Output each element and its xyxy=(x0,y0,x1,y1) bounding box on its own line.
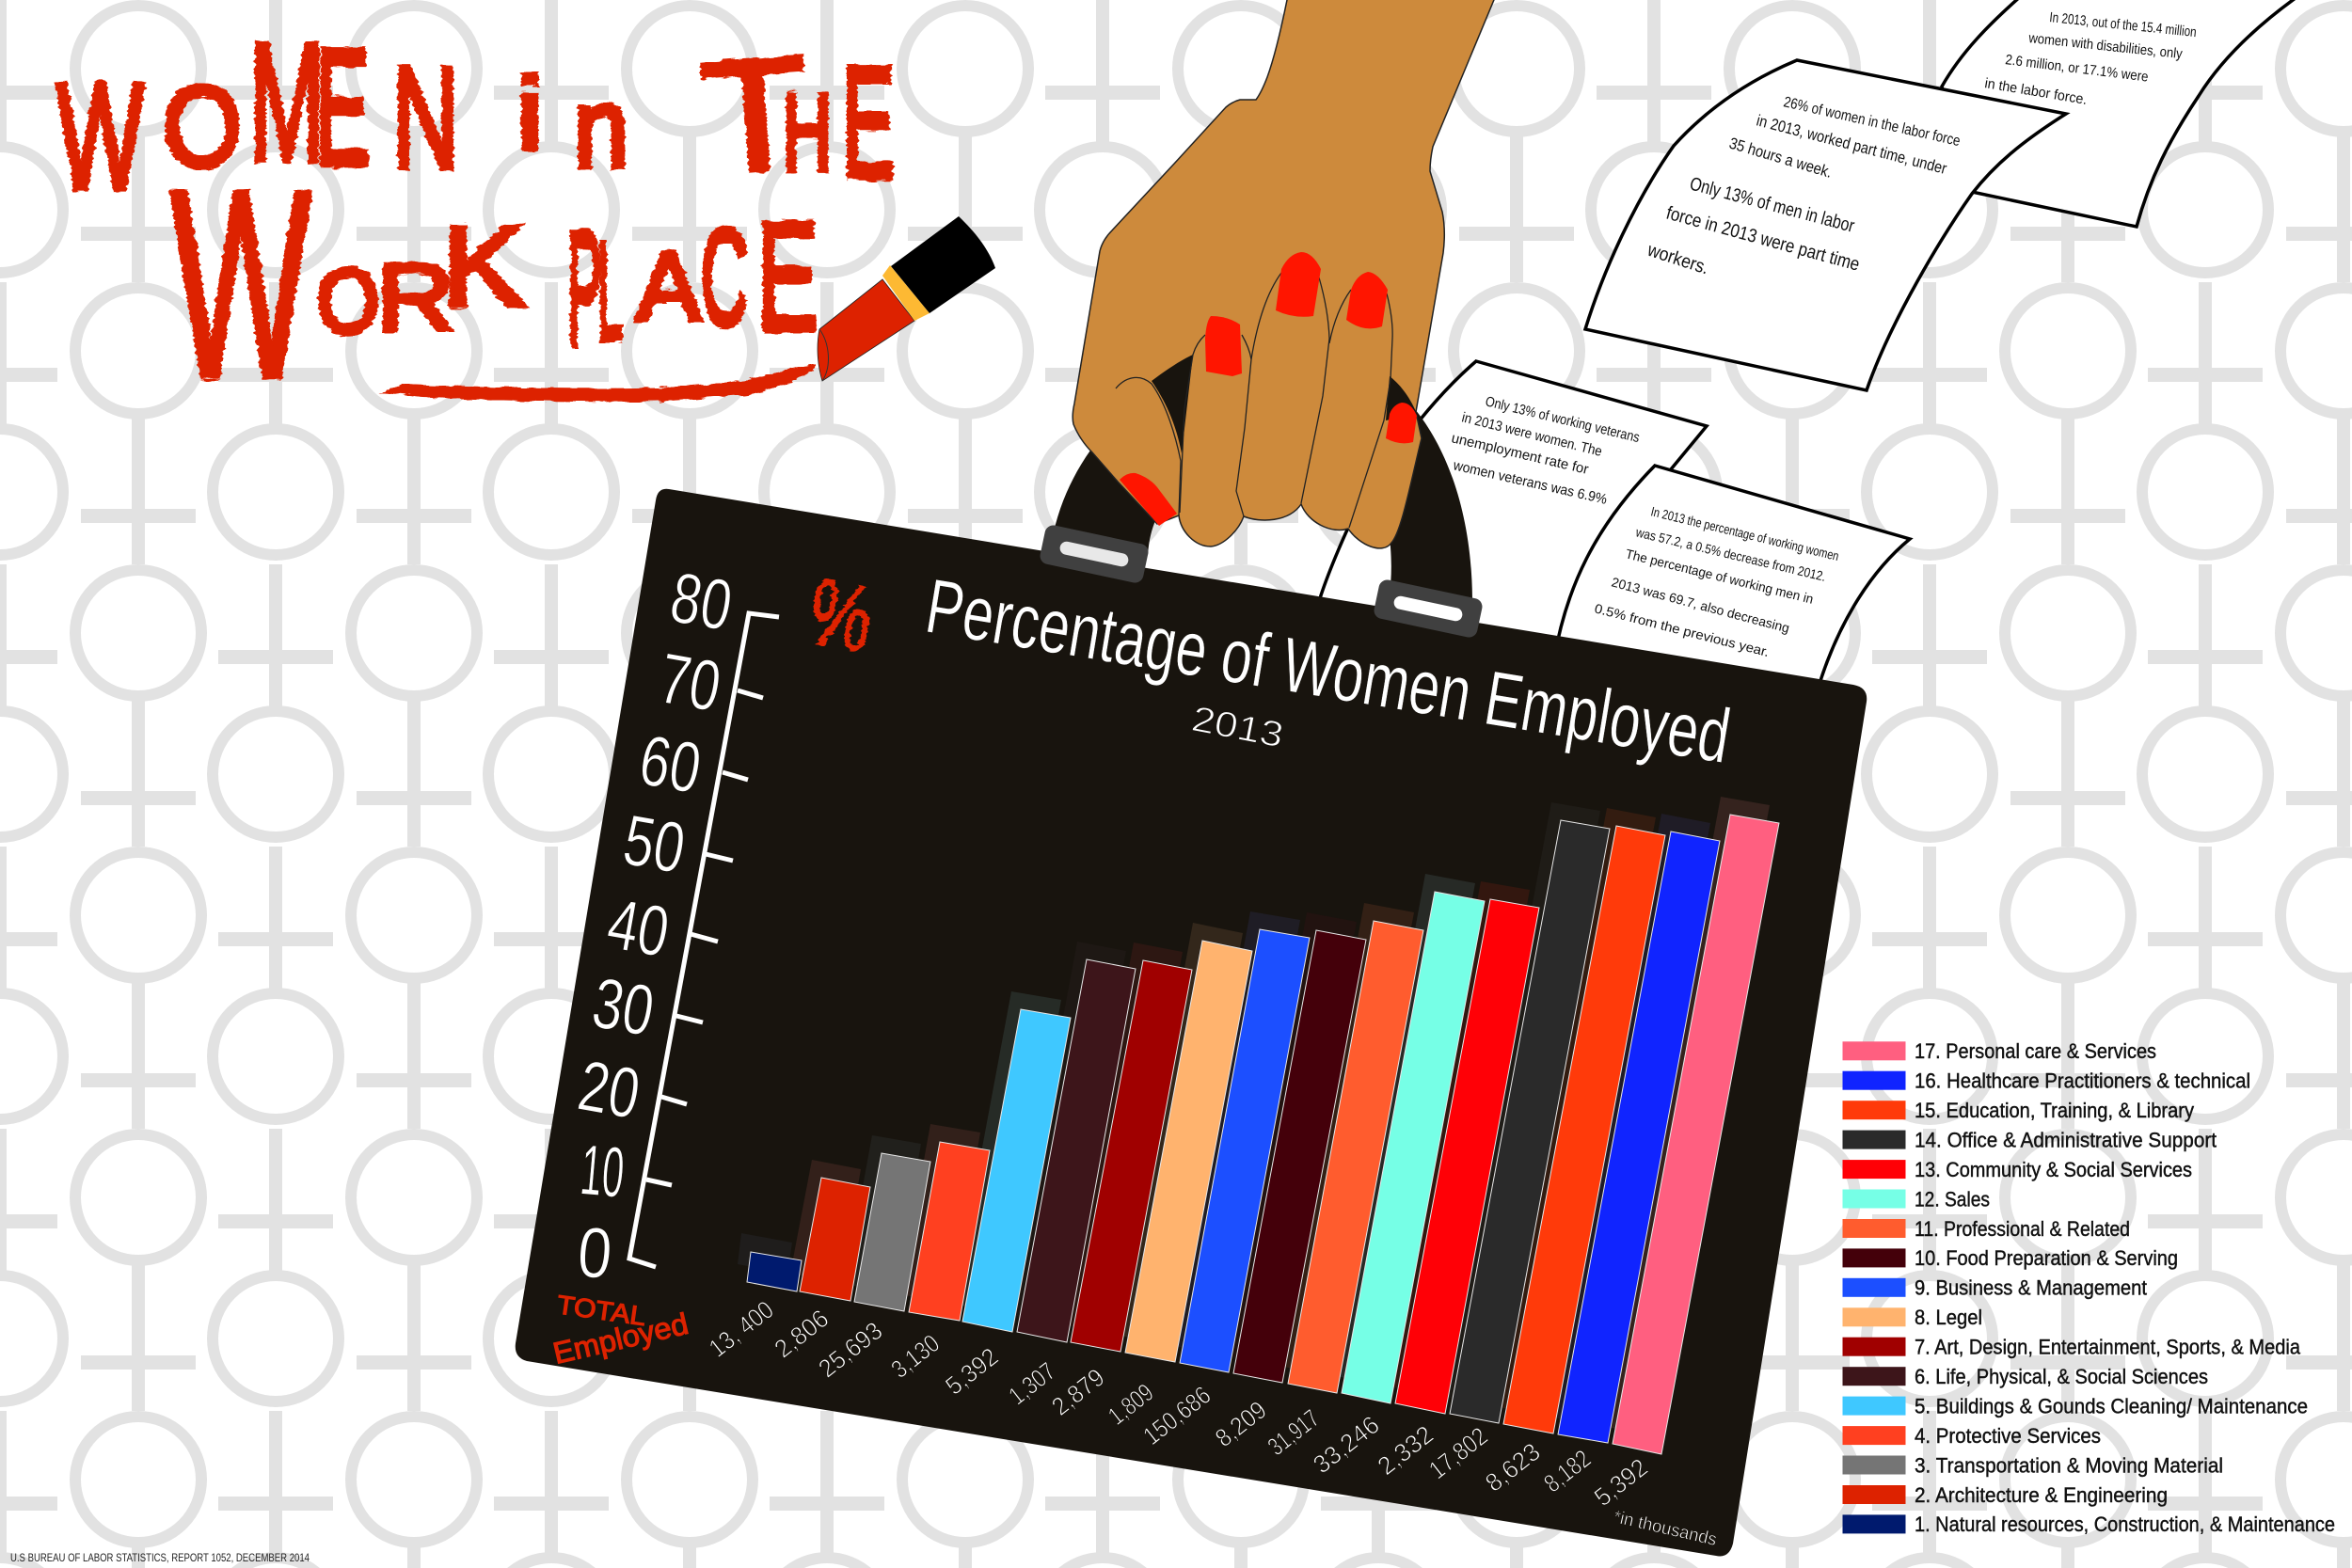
paper: disabilities: In 2013, out of the 15.4 million xyxy=(2049,9,2198,40)
paper: part time work: 26% of women in the labor force xyxy=(1782,94,1962,150)
title: Women in the Workplace: P xyxy=(567,198,602,381)
footnote: in thousands: *in thousands xyxy=(1612,1507,1719,1550)
lipstick underline stroke xyxy=(380,364,816,402)
bar chart xyxy=(738,797,1779,1454)
y axis labels: 70 xyxy=(654,638,726,727)
total employed values: 150,686 xyxy=(1137,1381,1216,1450)
title: Women in the Workplace: K xyxy=(442,202,525,330)
legend xyxy=(1842,1039,2335,1536)
legend: 15. Education, Training, & Library xyxy=(1915,1099,2194,1122)
title: Women in the Workplace: O xyxy=(163,63,242,190)
total employed values: 2,332 xyxy=(1373,1420,1438,1481)
total employed values: 17,802 xyxy=(1423,1422,1493,1484)
paper: part time work: workers. xyxy=(1645,240,1711,278)
title: Women in the Workplace: W xyxy=(56,54,144,221)
paper: working women percentage: 0.5% from the previous year. xyxy=(1593,600,1771,659)
legend: 13. Community & Social Services xyxy=(1915,1158,2192,1181)
paper: veterans xyxy=(1308,361,1707,715)
total employed values: 3,130 xyxy=(886,1329,945,1384)
bar shadows xyxy=(738,797,1770,1436)
title: Women in the Workplace: H xyxy=(783,72,832,193)
handle clip right xyxy=(1373,578,1484,639)
paper: working women percentage: In 2013 the percentage of working women xyxy=(1649,503,1840,563)
icon: lipstick xyxy=(818,216,995,381)
title: Women in the Workplace xyxy=(56,10,895,434)
legend: 8. Legel xyxy=(1915,1306,1982,1329)
title: Women in the Workplace: E xyxy=(842,35,895,212)
paper: disabilities xyxy=(1942,0,2299,227)
y axis labels: 30 xyxy=(587,962,660,1052)
bars xyxy=(747,815,1779,1454)
handle clip left xyxy=(1039,524,1150,584)
total employed label: TOTAL xyxy=(555,1290,648,1331)
legend: 3. Transportation & Moving Material xyxy=(1915,1453,2223,1477)
paper: part time work xyxy=(1585,60,2066,390)
nails xyxy=(1120,252,1417,526)
total employed values: 8,209 xyxy=(1210,1396,1272,1452)
legend: 7. Art, Design, Entertainment, Sports, & Media xyxy=(1915,1336,2301,1358)
paper: veterans: unemployment rate for xyxy=(1450,430,1590,478)
finger lines xyxy=(1116,273,1392,528)
title: Women in the Workplace: M xyxy=(249,10,325,197)
total employed values: 2,806 xyxy=(770,1304,834,1364)
paper: veterans: in 2013 were women. The xyxy=(1460,409,1604,460)
title: Women in the Workplace: R xyxy=(376,244,454,349)
total employed values: 2,879 xyxy=(1046,1363,1110,1421)
paper: working women percentage: 2013 was 69.7, also decreasing xyxy=(1610,574,1791,636)
paper: disabilities: in the labor force. xyxy=(1983,75,2089,108)
total employed label: Employed xyxy=(549,1307,691,1370)
legend: 14. Office & Administrative Support xyxy=(1915,1128,2217,1151)
total employed values: 25,693 xyxy=(813,1316,888,1384)
legend: 9. Business & Management xyxy=(1915,1276,2147,1300)
title: Women in the Workplace: L xyxy=(597,215,623,369)
y axis labels: 60 xyxy=(634,720,707,809)
paper: disabilities: women with disabilities, only xyxy=(2027,30,2184,62)
paper: veterans: Only 13% of working veterans xyxy=(1484,393,1641,446)
chart title: Percentage of Women Employed xyxy=(920,563,1736,780)
paper: veterans: women veterans was 6.9% xyxy=(1451,457,1609,508)
title: Women in the Workplace: O xyxy=(317,250,379,352)
total employed values: 1,809 xyxy=(1103,1378,1159,1431)
y axis labels: 80 xyxy=(665,557,738,646)
percent sign: % xyxy=(802,559,881,673)
hand xyxy=(1073,0,1496,548)
paper: disabilities: 2.6 million, or 17.1% were xyxy=(2005,52,2149,86)
legend: 11. Professional & Related xyxy=(1915,1217,2130,1241)
title: Women in the Workplace: C xyxy=(701,202,748,355)
legend: 17. Personal care & Services xyxy=(1915,1039,2156,1063)
legend: 4. Protective Services xyxy=(1915,1424,2101,1448)
total employed values: 5,392 xyxy=(1589,1453,1653,1512)
total employed values xyxy=(704,1295,1653,1512)
y axis labels: 0 xyxy=(575,1212,615,1295)
total employed values: 13, 400 xyxy=(704,1295,779,1363)
total employed values: 8,623 xyxy=(1480,1437,1546,1497)
title: Women in the Workplace: n xyxy=(574,65,628,193)
paper: working women percentage: was 57.2, a 0.5% decrease from 2012. xyxy=(1633,524,1827,584)
chart year: 2013 xyxy=(1188,700,1286,756)
title: Women in the Workplace: E xyxy=(757,192,818,362)
paper: part time work: Only 13% of men in labor xyxy=(1688,174,1857,237)
title: Women in the Workplace: T xyxy=(696,24,815,207)
paper: part time work: 35 hours a week. xyxy=(1727,135,1835,182)
total employed values: 33,246 xyxy=(1308,1411,1385,1479)
total employed values: 5,392 xyxy=(940,1342,1004,1401)
title: Women in the Workplace: i xyxy=(516,57,544,171)
y axis labels: 50 xyxy=(618,800,691,889)
legend: 12. Sales xyxy=(1915,1187,1990,1211)
briefcase body xyxy=(516,489,1867,1556)
briefcase handle xyxy=(1052,351,1472,602)
total employed values: 8,182 xyxy=(1538,1445,1597,1497)
y axis labels: 10 xyxy=(578,1130,628,1213)
legend: 10. Food Preparation & Serving xyxy=(1915,1246,2178,1270)
y axis labels: 40 xyxy=(602,883,675,973)
y axis xyxy=(629,613,779,1267)
y axis labels: 20 xyxy=(573,1045,645,1134)
paper: working women percentage xyxy=(1554,466,1910,696)
title: Women in the Workplace: W xyxy=(171,136,310,434)
hand gap showing handle xyxy=(1152,355,1193,453)
legend: 6. Life, Physical, & Social Sciences xyxy=(1915,1365,2208,1388)
source credit: U.S BUREAU OF LABOR STATISTICS, REPORT 1052, DECEMBER 2014 xyxy=(10,1551,310,1564)
paper: part time work: force in 2013 were part time xyxy=(1664,203,1862,276)
title: Women in the Workplace: A xyxy=(637,231,701,341)
total employed values: 1,307 xyxy=(1003,1357,1061,1410)
paper: part time work: in 2013, worked part time, under xyxy=(1755,111,1948,178)
y axis labels xyxy=(573,557,738,1295)
title: Women in the Workplace: N xyxy=(392,39,459,198)
legend: 5. Buildings & Gounds Cleaning/ Maintenance xyxy=(1915,1394,2308,1418)
paper: working women percentage: The percentage of working men in xyxy=(1624,546,1815,607)
legend: 2. Architecture & Engineering xyxy=(1915,1483,2168,1507)
legend: 16. Healthcare Practitioners & technical xyxy=(1915,1069,2250,1093)
total employed values: 31,917 xyxy=(1263,1404,1325,1461)
title: Women in the Workplace: E xyxy=(315,16,370,200)
